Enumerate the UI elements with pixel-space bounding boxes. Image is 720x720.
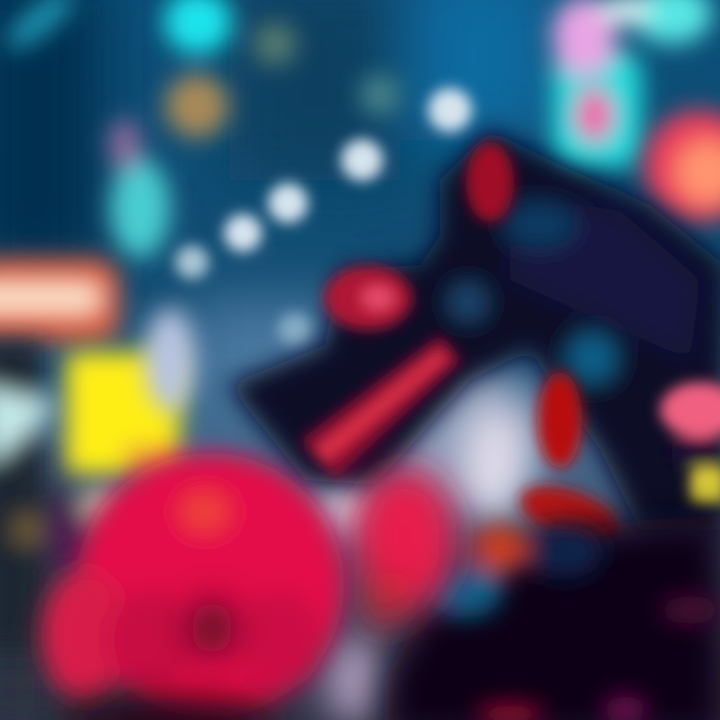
creature: small pink blob, centre right (353, 468, 457, 628)
neon sign: top right cyan and pink (552, 0, 712, 168)
building windows: lights in the distance (0, 0, 400, 258)
left street edge: white sign and dark pillar (0, 308, 196, 650)
foreground: dark mass with blue and red glints (385, 515, 720, 720)
creature: dark dragon silhouette (228, 130, 720, 555)
neon sign: orange and white bar, left (0, 258, 120, 342)
sign: yellow panel (66, 352, 180, 475)
creature: large pink puffball, foreground (41, 453, 344, 720)
neon sign: round coral lamp (644, 110, 720, 222)
neon sign: right edge pink and yellow (660, 382, 720, 504)
string of white lights (175, 88, 472, 347)
central haze: pale figure behind the creature (313, 368, 550, 720)
